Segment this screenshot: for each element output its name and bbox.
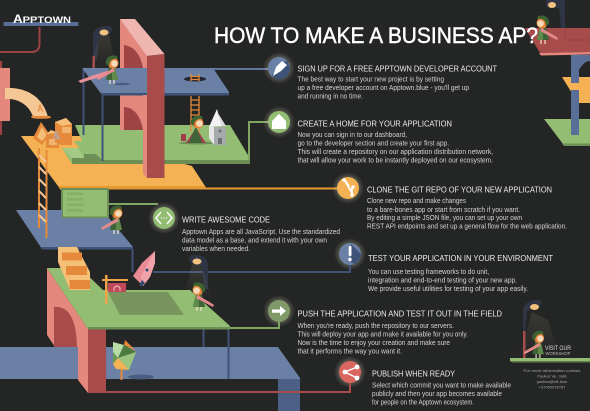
push text: This will deploy your app and make it available for you only. [298, 332, 468, 338]
right red platform [525, 28, 590, 56]
step 1 text [298, 64, 497, 100]
contact info [524, 368, 581, 390]
lower-left green box: 01000011 [67, 192, 84, 196]
icon: arrow [268, 300, 290, 322]
step 3 text: REST API endpoints and set up a general flow for the web application. [367, 224, 567, 230]
small house [209, 109, 226, 145]
pillar edge [143, 95, 147, 178]
blue connector to warning icon [132, 249, 350, 272]
orange steps [58, 247, 90, 290]
publish text: Select which commit you want to make available [372, 383, 511, 390]
pink block under green platform [47, 268, 106, 393]
push text: When you're ready, push the repository to our servers. [298, 323, 454, 330]
icon: pen [268, 57, 290, 79]
publish text: for people on the Apptown ecosystem. [372, 400, 474, 406]
publish text: PUBLISH WHEN READY [372, 369, 455, 379]
lower-left green box: 01000111 [67, 208, 83, 212]
right yellow platform [562, 77, 590, 103]
step 3 text: CLONE THE GIT REPO OF YOUR NEW APPLICATION [367, 185, 552, 195]
step 2 text: Now you can sign in to our dashboard, [298, 132, 407, 139]
test text: We provide useful utilities for testing of your app easily. [368, 286, 528, 293]
publish text: publicly and then your app becomes available [372, 391, 502, 398]
lower-left green box [62, 189, 108, 218]
contact info: +37060378787 [539, 384, 566, 390]
lower-left green box: 01000001 [67, 203, 84, 207]
pink rocket house [133, 251, 155, 286]
cardboard boxes: & [53, 130, 61, 142]
girl on blue platform [78, 55, 130, 85]
lamp top right [546, 0, 565, 28]
lower-left green box: 01010111 [67, 198, 83, 202]
blue platform [82, 68, 229, 96]
step 2 text [298, 118, 493, 164]
wide blue platform [0, 347, 300, 379]
step 3 text: By editing a simple JSON file, you can set up your own [367, 215, 522, 222]
step 1 text: The best way to start your new project is by setting [298, 76, 444, 84]
step 2 text: CREATE A HOME FOR YOUR APPLICATION [298, 118, 452, 128]
right blue pillar [571, 55, 590, 135]
pillar dark face [147, 54, 164, 178]
blue platform posts [84, 70, 102, 161]
left pink block with pipe [0, 61, 51, 134]
green connector to home icon [249, 122, 270, 160]
publish text [372, 369, 511, 406]
test text: You can use testing frameworks to do unit, [368, 269, 489, 276]
girl on red platform [537, 15, 558, 44]
right green platform [544, 119, 590, 146]
step 1 text: SIGN UP FOR A FREE APPTOWN DEVELOPER ACCOUNT [298, 64, 497, 74]
write code text: Apptown Apps are all JavaScript. Use the standardized [182, 229, 340, 236]
red connector to share icon [106, 382, 350, 392]
step 1 text: up a free developer account on Apptown.blue - you'll get up [298, 85, 469, 92]
sign post [102, 275, 128, 304]
contact info: Paulius Ve. Jatis [537, 374, 567, 378]
tall ladder [39, 148, 46, 238]
green platform with stairs [47, 268, 230, 330]
step 2 text: that will allow your work to be instantly deployed on our ecosystem. [298, 158, 493, 164]
step 3 text: Clone new repo and make changes [367, 198, 466, 205]
green platform posts [204, 329, 228, 379]
write code text: data model as a base, and extend it with your own [182, 238, 327, 244]
icon: git branch [337, 177, 359, 199]
arch wall [120, 19, 164, 178]
blue connector to pen icon [213, 68, 270, 70]
write code text: WRITE AWESOME CODE [182, 215, 270, 225]
green connector to arrow icon [230, 321, 279, 328]
visit workshop label: WORKSHOP [546, 351, 570, 357]
icon: warning [339, 243, 361, 265]
icon: share [339, 361, 361, 383]
step 3 text [367, 185, 567, 230]
contact info: For more information contact [524, 368, 581, 373]
yellow connector to git icon [58, 186, 338, 190]
visit workshop label: VISIT OUR [545, 346, 572, 352]
title: HOW TO MAKE A BUSINESS AP? [214, 23, 538, 48]
test text [368, 253, 553, 293]
test text: TEST YOUR APPLICATION IN YOUR ENVIRONMENT [368, 253, 553, 263]
push text [298, 309, 502, 356]
logo: APPTOWN [13, 14, 71, 26]
visit workshop label [545, 346, 572, 357]
low-poly tree [113, 340, 154, 380]
push text: PUSH THE APPLICATION AND TEST IT OUT IN THE FIELD [298, 309, 502, 319]
icon glows [148, 52, 366, 388]
step 2 text: This will create a repository on our application distribution network, [298, 149, 493, 156]
workshop girl [524, 331, 544, 358]
dark blue column [278, 379, 300, 411]
top-left yellow platform [21, 136, 205, 186]
cardboard boxes [33, 118, 72, 148]
logo [4, 14, 78, 26]
girl on green platform [193, 282, 214, 311]
icon: home [268, 111, 290, 133]
test text: integration and end-to-end testing of your new app. [368, 278, 517, 284]
step 3 text: to a bare-bones app or start from scratch if you want. [367, 207, 520, 214]
connector: green to code icon [108, 203, 158, 205]
green platform [62, 125, 250, 164]
push text: that it performs the way you want it. [298, 348, 402, 356]
blue platform lower-left [16, 210, 133, 250]
push text: Now is the time to enjoy your creation and make sure [298, 340, 450, 347]
girl on lower-left platform [101, 205, 122, 234]
girl sweeping on green platform [179, 115, 215, 144]
ladder under blue platform [191, 96, 199, 132]
workshop lamp and platform [510, 300, 590, 362]
write code text: variables when needed. [182, 246, 250, 253]
red pipe from logo [0, 27, 40, 52]
step 1 text: and running in no time. [298, 94, 363, 100]
step 2 text: go to the developer section and create your first app. [298, 140, 449, 148]
contact info: paulius@idk.blue [537, 379, 568, 384]
lamp on blue platform [88, 26, 117, 70]
write code text [182, 215, 340, 253]
lamp on green platform [184, 255, 213, 299]
icon: code [153, 207, 175, 229]
